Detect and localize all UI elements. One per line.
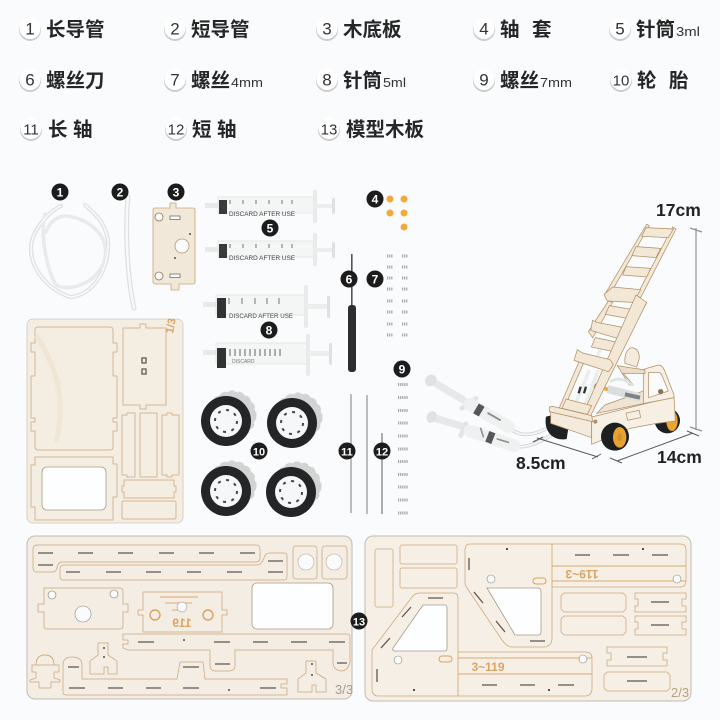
legend item 7: 7 <box>170 70 180 90</box>
legend item 1 <box>19 18 105 41</box>
legend item 13: 13 <box>321 122 337 138</box>
callout 11: 11 <box>341 446 353 458</box>
legend item 7: 4mm <box>231 75 263 90</box>
callout 13 <box>350 612 368 630</box>
callout 12: 12 <box>376 446 388 458</box>
legend item 5 <box>609 18 700 41</box>
legend item 3: 3 <box>322 20 332 38</box>
legend item 2 <box>164 18 250 41</box>
screwdriver <box>348 254 356 372</box>
legend item 5: 5 <box>615 20 625 38</box>
legend item 11: 轴 <box>73 119 93 141</box>
legend item 11 <box>20 118 93 141</box>
long rods <box>351 394 367 514</box>
wood board 2/3: 3~119 <box>471 660 505 674</box>
legend item 12: 短 <box>192 119 212 141</box>
legend item 3 <box>316 18 402 41</box>
wood board 3/3 <box>27 536 353 699</box>
legend item 10 <box>610 69 689 92</box>
lower syringe <box>424 409 514 446</box>
hoses <box>510 422 560 447</box>
legend item 11: 长 <box>48 119 68 141</box>
legend item 5: 针筒 <box>636 19 675 41</box>
legend item 9: 7mm <box>540 75 572 90</box>
orange bushings <box>386 196 408 230</box>
wood board 2/3: 119~3 <box>565 567 599 581</box>
legend item 12: 12 <box>168 122 184 138</box>
callout 11 <box>338 442 356 460</box>
wheel bottom left <box>201 462 256 516</box>
syringe 5ml bottom: DISCARD <box>232 359 255 365</box>
legend item 8: 5ml <box>383 75 406 90</box>
legend item 6 <box>19 69 105 92</box>
callout 8 <box>260 322 278 338</box>
legend item 9: 9 <box>479 70 489 90</box>
syringes 3ml <box>205 190 335 266</box>
wooden base plate <box>153 203 195 290</box>
callout 7: 7 <box>372 272 379 286</box>
truck body <box>551 348 675 444</box>
rear wheel <box>546 415 568 439</box>
far front wheel <box>655 408 680 433</box>
wood board 1/3: 1/3 <box>164 317 179 335</box>
legend item 2: 2 <box>170 20 180 38</box>
legend item 7 <box>164 69 263 92</box>
callout 6 <box>340 270 358 288</box>
legend item 4 <box>473 18 552 41</box>
dimension line width <box>610 431 699 463</box>
4mm screws <box>387 256 408 335</box>
dimension 17cm: 17cm <box>656 200 701 220</box>
wood board 3/3: 3/3 <box>335 682 353 697</box>
dimension line depth <box>533 437 601 459</box>
syringe 5ml top: DISCARD AFTER USE <box>229 313 293 320</box>
callout 5 <box>262 220 278 236</box>
callout 6: 6 <box>346 272 353 286</box>
7mm screws <box>398 384 408 513</box>
callout 4 <box>366 190 384 208</box>
legend item 10: 10 <box>613 72 629 90</box>
legend item 6: 螺丝刀 <box>46 70 105 92</box>
callout 8: 8 <box>266 324 273 338</box>
legend item 12: 轴 <box>217 119 237 141</box>
legend item 10: 胎 <box>669 70 689 92</box>
syringe 3ml bottom: DISCARD AFTER USE <box>229 255 295 262</box>
short rod <box>381 433 383 514</box>
wheel top left <box>201 392 256 446</box>
callout 13: 13 <box>353 616 365 628</box>
water cylinder and hoses <box>575 338 640 405</box>
legend item 8: 8 <box>322 70 332 90</box>
callout 4: 4 <box>372 192 379 206</box>
legend item 8: 针筒 <box>343 70 382 92</box>
legend item 13: 模型木板 <box>346 118 425 141</box>
wheels <box>201 392 322 517</box>
syringe 3ml top: DISCARD AFTER USE <box>229 211 295 218</box>
wheel top right <box>267 394 322 448</box>
callout 3 <box>168 184 184 200</box>
wood board 2/3: 2/3 <box>671 685 689 700</box>
ladder <box>549 224 676 422</box>
callout 1: 1 <box>57 186 64 200</box>
parts legend <box>19 18 700 141</box>
wood board 3/3: 119 <box>172 616 192 630</box>
upper syringe <box>422 372 508 427</box>
legend item 5: 3ml <box>676 24 700 39</box>
dimension 14cm: 14cm <box>657 447 702 467</box>
legend item 6: 6 <box>25 70 35 90</box>
wood board 1/3 <box>27 317 183 523</box>
wheel bottom right <box>266 462 320 517</box>
callout 5: 5 <box>267 222 274 236</box>
legend item 9: 螺丝 <box>500 70 539 92</box>
legend item 8 <box>316 69 406 92</box>
assembled fire truck <box>546 224 680 451</box>
legend item 11: 11 <box>23 122 39 138</box>
numbered callouts <box>52 184 410 630</box>
dimension line height <box>690 228 702 431</box>
legend item 4: 套 <box>532 19 552 41</box>
callout 3: 3 <box>173 186 180 200</box>
basket cutout <box>30 655 60 688</box>
legend item 7: 螺丝 <box>191 70 230 92</box>
legend item 1: 1 <box>25 20 35 38</box>
legend item 2: 短导管 <box>191 18 250 41</box>
legend item 12 <box>165 118 237 141</box>
callout 9 <box>394 360 410 378</box>
front wheel <box>601 423 629 451</box>
callout 10 <box>250 442 268 460</box>
wood board 2/3 <box>365 536 691 701</box>
callout 2: 2 <box>117 186 124 200</box>
long tube <box>31 205 108 297</box>
legend item 1: 长导管 <box>46 18 105 41</box>
callout 12 <box>374 442 390 460</box>
callout 10: 10 <box>253 446 265 458</box>
dimension 8.5cm: 8.5cm <box>516 453 566 473</box>
syringes 5ml <box>203 285 332 376</box>
callout 2 <box>112 184 128 200</box>
callout 9: 9 <box>399 362 406 376</box>
callout 1 <box>52 184 68 200</box>
short tube <box>127 197 134 308</box>
legend item 9 <box>473 69 572 92</box>
callout 7 <box>366 270 384 288</box>
legend item 10: 轮 <box>637 70 657 92</box>
legend item 4: 轴 <box>500 19 520 41</box>
legend item 4: 4 <box>479 20 489 38</box>
assembled syringes and hoses <box>422 372 560 447</box>
legend item 3: 木底板 <box>343 18 402 41</box>
